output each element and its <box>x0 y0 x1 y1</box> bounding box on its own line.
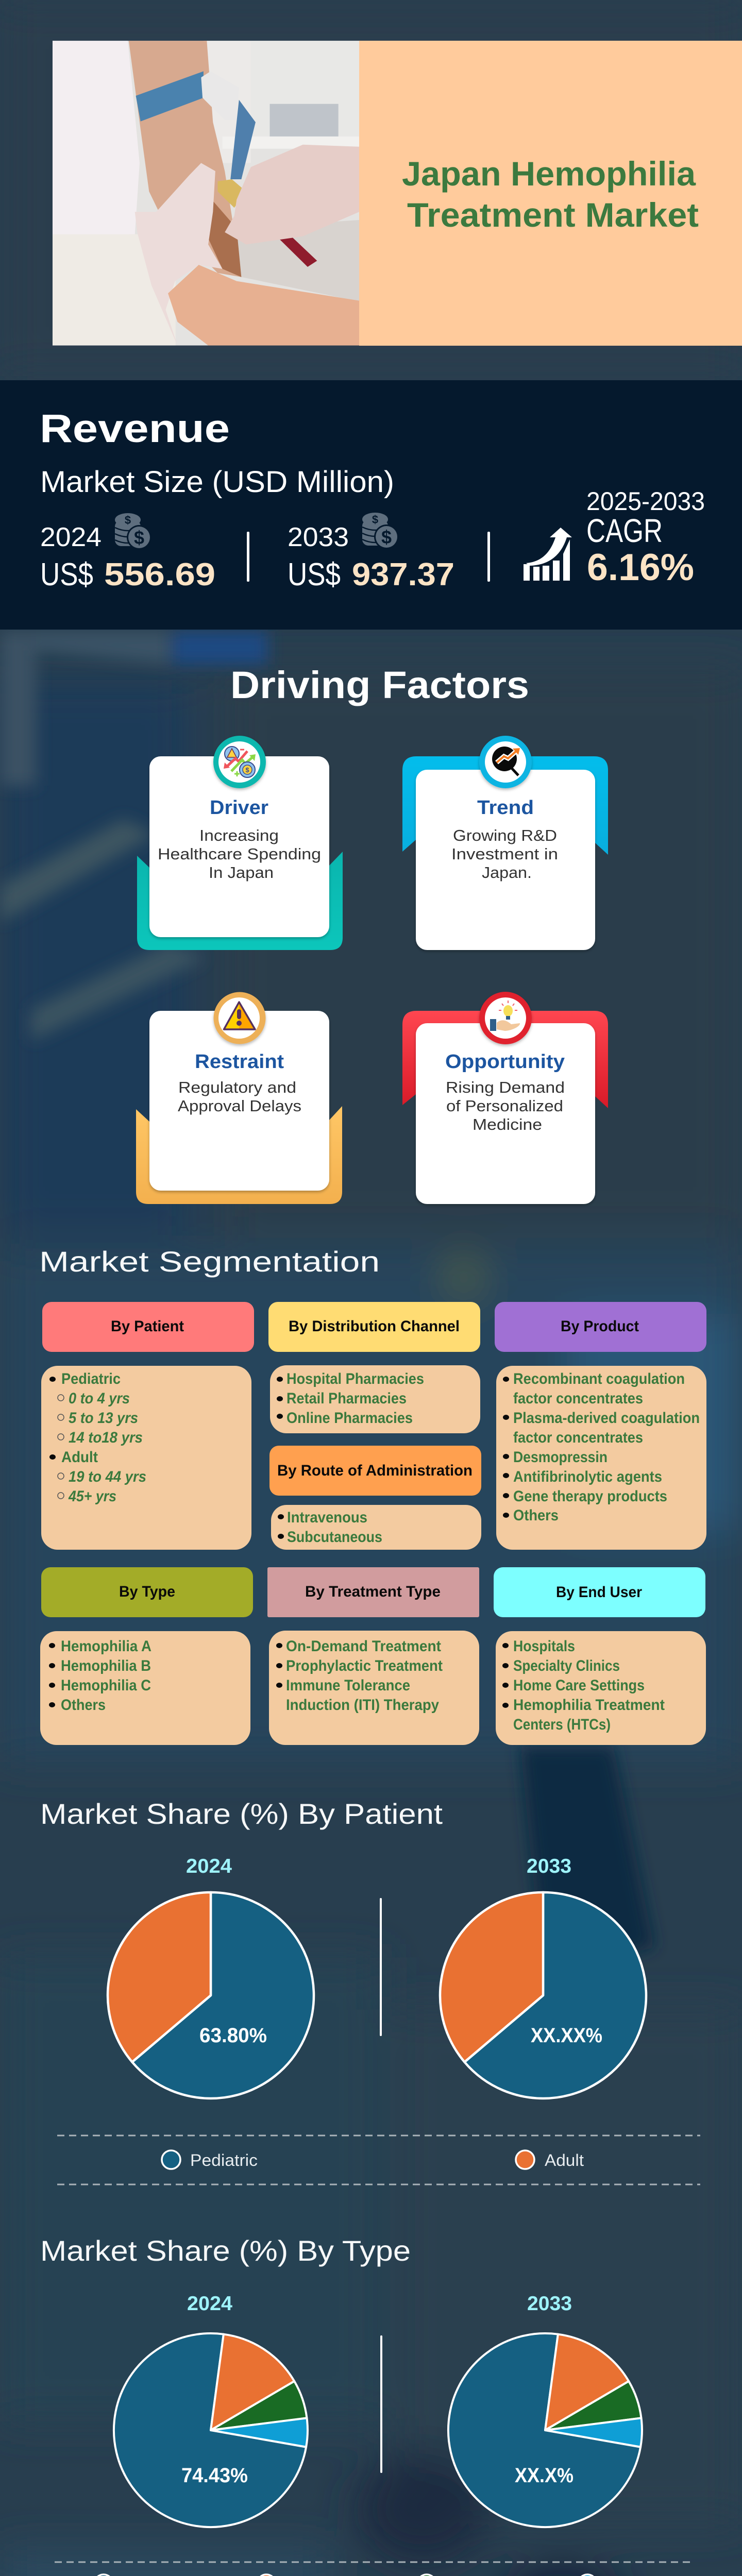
panel: driver <box>137 736 343 950</box>
panel: by product: Plasma-derived coagulation <box>513 1410 700 1427</box>
stat: 2024 revenue: US$ <box>40 557 93 592</box>
pie chart: by type 2024: 74.43% <box>181 2464 248 2487</box>
market size label: Market Size (USD Million) <box>40 465 394 499</box>
panel: by distribution channel: Online Pharmacies <box>286 1410 413 1427</box>
icon: coins: $ <box>134 527 144 548</box>
panel: by end user: Hospitals <box>513 1638 575 1655</box>
icon: coins: $ <box>372 513 378 526</box>
title panel <box>359 41 742 346</box>
panel: by route of administration: Subcutaneous <box>287 1529 382 1546</box>
icon: driver gears and arrows: $ <box>245 766 249 774</box>
title <box>402 155 699 234</box>
stat: 2033 revenue: US$ <box>288 557 341 592</box>
panel: by product: By Product <box>561 1318 639 1335</box>
pie chart: by type 2033: 2033 <box>527 2293 572 2315</box>
pie chart: by patient 2033 <box>440 1855 646 2098</box>
panel: by patient: 45+ yrs <box>68 1488 116 1505</box>
text: driver description: Healthcare Spending <box>158 845 321 863</box>
panel: by end user <box>494 1567 706 1745</box>
panel: revenue <box>0 380 742 630</box>
panel: by product: Recombinant coagulation <box>513 1370 685 1387</box>
panel: by end user: By End User <box>556 1584 642 1601</box>
hero photo: blood draw from arm <box>53 41 359 346</box>
hero banner <box>53 41 742 346</box>
panel: by product: Antifibrinolytic agents <box>513 1468 662 1485</box>
panel: by distribution channel: Retail Pharmacies <box>286 1390 407 1407</box>
heading: driver: Driver <box>210 797 268 819</box>
title: Japan Hemophilia <box>402 155 696 193</box>
text: restraint description <box>178 1078 301 1115</box>
panel: by patient: 5 to 13 yrs <box>69 1410 138 1427</box>
stat: 2033 revenue <box>288 522 454 592</box>
heading: revenue: Revenue <box>40 406 230 451</box>
panel: by type: Hemophilia B <box>61 1657 151 1674</box>
pie chart: by type 2033: XX.X% <box>515 2464 574 2487</box>
panel: by distribution channel: Hospital Pharmacies <box>286 1370 424 1387</box>
icon: coins: $ <box>381 527 392 548</box>
panel: by patient: 19 to 44 yrs <box>69 1468 146 1485</box>
panel: by type: By Type <box>119 1583 175 1600</box>
heading: restraint: Restraint <box>195 1051 284 1073</box>
title: Treatment Market <box>407 196 699 234</box>
pie chart: by type 2033 <box>448 2293 642 2527</box>
panel: opportunity <box>402 992 608 1204</box>
panel: by treatment type: On-Demand Treatment <box>286 1638 441 1655</box>
panel: by product: Desmopressin <box>513 1449 608 1466</box>
panel: trend <box>402 736 608 950</box>
panel: by end user: Specialty Clinics <box>513 1657 620 1674</box>
stat: CAGR: 6.16% <box>587 547 694 588</box>
icon: trend magnifier <box>479 736 532 788</box>
pie chart: by type 2024: 2024 <box>187 2293 232 2315</box>
panel: by treatment type <box>267 1567 479 1745</box>
text: trend description: Investment in <box>451 845 558 863</box>
panel: by end user: Centers (HTCs) <box>513 1716 611 1733</box>
pie chart: by type 2024 <box>114 2293 308 2527</box>
icon: coins <box>362 513 399 549</box>
panel: restraint <box>136 992 342 1204</box>
text: driver description <box>158 826 321 882</box>
text: trend description <box>451 826 558 882</box>
icon: driver gears and arrows <box>213 736 266 788</box>
stat: CAGR: CAGR <box>586 512 663 549</box>
panel: by distribution channel <box>268 1302 480 1433</box>
text: opportunity description: Rising Demand <box>446 1078 565 1096</box>
panel: by product: factor concentrates <box>513 1429 643 1446</box>
text: driver description: In Japan <box>209 863 274 882</box>
icon: growth arrow <box>524 528 572 581</box>
pie chart: by patient 2024: 2024 <box>186 1855 232 1877</box>
heading: driving factors: Driving Factors <box>230 664 529 706</box>
icon: warning triangle <box>213 992 266 1044</box>
panel: by type: Hemophilia A <box>61 1638 151 1655</box>
text: opportunity description <box>446 1078 565 1133</box>
panel: by patient: Adult <box>61 1449 98 1466</box>
stat: 2024 revenue: 2024 <box>40 522 102 552</box>
panel: by product <box>495 1302 706 1550</box>
panel: by product: Gene therapy products <box>513 1488 667 1505</box>
panel: by product: Others <box>513 1507 559 1524</box>
panel: by type <box>40 1567 253 1745</box>
panel: by treatment type: Prophylactic Treatment <box>286 1657 443 1674</box>
heading: opportunity: Opportunity <box>445 1051 565 1073</box>
panel: by patient: 14 to18 yrs <box>69 1429 143 1446</box>
panel: by end user: Hemophilia Treatment <box>513 1697 665 1714</box>
panel: by type: Hemophilia C <box>61 1677 151 1694</box>
panel: by patient <box>41 1302 254 1550</box>
heading: market segmentation: Market Segmentation <box>39 1245 380 1278</box>
legend: type <box>94 2574 655 2576</box>
panel: by treatment type: Induction (ITI) Therapy <box>286 1697 439 1714</box>
pie chart: by patient 2033: XX.XX% <box>531 2024 602 2047</box>
stat: 2024 revenue: 556.69 <box>104 557 215 592</box>
stat: CAGR <box>586 487 705 588</box>
stat: 2024 revenue <box>40 522 215 592</box>
text: driver description: Increasing <box>199 826 279 844</box>
text: trend description: Growing R&D <box>453 826 557 844</box>
stat: 2033 revenue: 937.37 <box>352 557 454 592</box>
heading: market share by type: Market Share (%) By Type <box>40 2234 411 2267</box>
text: restraint description: Regulatory and <box>178 1078 296 1096</box>
panel: by end user: Home Care Settings <box>513 1677 645 1694</box>
panel: by treatment type: By Treatment Type <box>305 1583 441 1600</box>
panel: by product: factor concentrates <box>513 1390 643 1407</box>
legend: patient: Pediatric <box>190 2151 258 2170</box>
panel: by route of administration <box>269 1446 481 1550</box>
text: opportunity description: of Personalized <box>446 1097 563 1115</box>
pie chart: by patient 2024 <box>108 1855 314 2098</box>
stat: CAGR: 2025-2033 <box>586 487 705 516</box>
pie chart: by patient 2024: 63.80% <box>199 2024 267 2047</box>
text: restraint description: Approval Delays <box>178 1097 301 1115</box>
panel: by patient: Pediatric <box>61 1370 121 1387</box>
icon: coins: $ <box>125 514 131 527</box>
icon: hand with light bulb <box>479 992 532 1044</box>
heading: trend: Trend <box>477 797 534 819</box>
panel: by treatment type: Immune Tolerance <box>286 1677 410 1694</box>
panel: by patient: 0 to 4 yrs <box>69 1390 130 1407</box>
panel: by patient: By Patient <box>111 1318 184 1335</box>
heading: market share by patient: Market Share (%) By Patient <box>40 1798 443 1830</box>
text: opportunity description: Medicine <box>473 1115 542 1133</box>
panel: by distribution channel: By Distribution Channel <box>289 1318 460 1335</box>
text: trend description: Japan. <box>482 863 532 882</box>
icon: coins <box>115 513 151 550</box>
panel: by route of administration: Intravenous <box>287 1509 367 1526</box>
stat: 2033 revenue: 2033 <box>288 522 349 552</box>
panel: by route of administration: By Route of Administration <box>277 1462 473 1479</box>
legend: patient: Adult <box>545 2151 584 2170</box>
pie chart: by patient 2033: 2033 <box>527 1855 571 1877</box>
legend: patient <box>162 2150 584 2170</box>
panel: by type: Others <box>61 1697 106 1714</box>
